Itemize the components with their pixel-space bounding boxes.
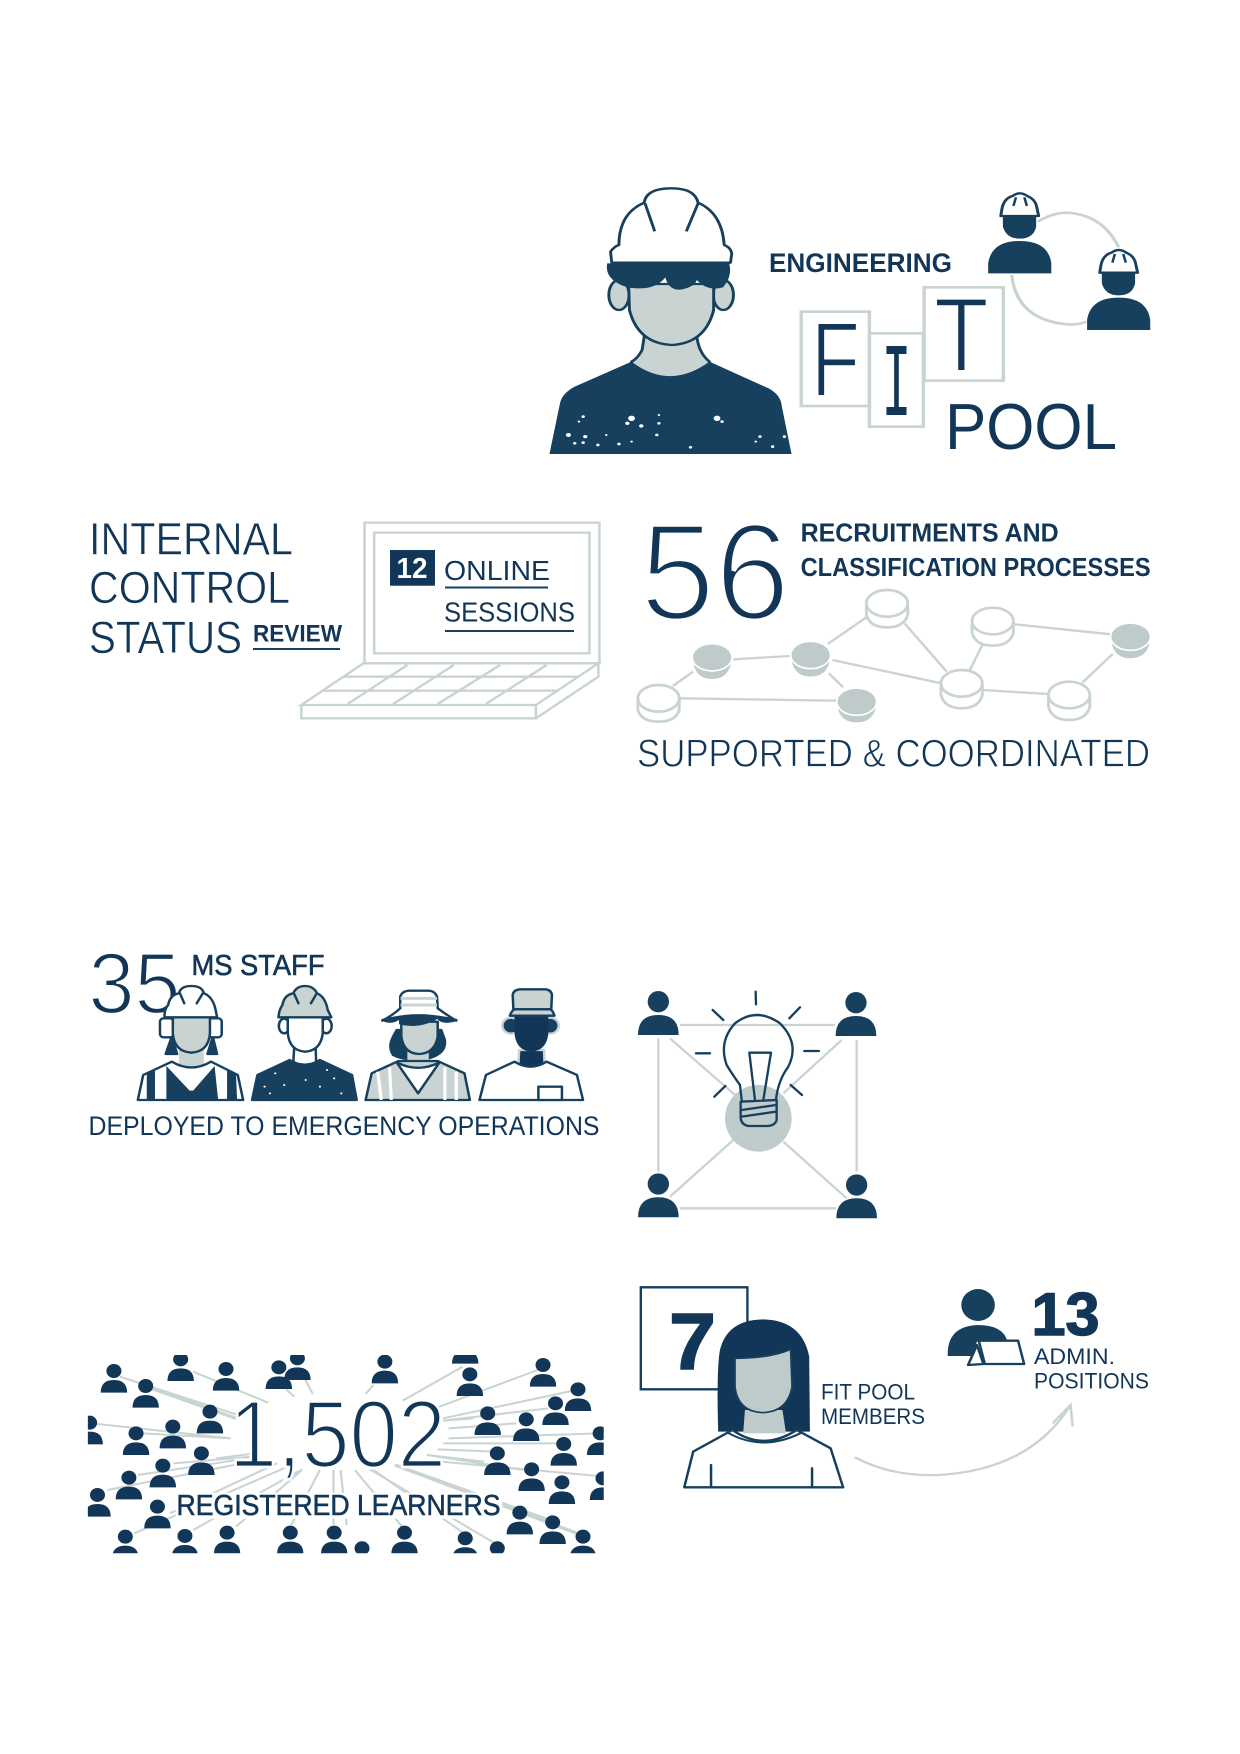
icon: person at laptop — [948, 1289, 1024, 1365]
panel: 7 FIT pool members to 13 admin positions — [641, 1281, 1149, 1487]
illustration: woman with dark hair — [684, 1319, 843, 1487]
panel: Engineering FIT Pool — [549, 188, 1150, 463]
label: FIT pool members: FIT POOL — [821, 1379, 915, 1404]
label: REVIEW: REVIEW — [253, 621, 342, 648]
panel: 56 recruitments and classification processes — [637, 496, 1151, 775]
letter boxes: FIT: F — [811, 300, 860, 420]
label: FIT pool members: MEMBERS — [821, 1404, 925, 1429]
panel: 1,502 registered learners — [88, 1355, 604, 1554]
heading: Internal control status: STATUS — [89, 612, 242, 663]
arrow: curved to admin positions — [855, 1405, 1073, 1475]
icon: two engineers connected in a loop — [988, 193, 1150, 330]
label: online sessions: ONLINE — [444, 555, 550, 586]
badge: 12: 12 — [396, 553, 428, 585]
label: MS staff: MS STAFF — [192, 950, 324, 982]
label: online sessions — [444, 555, 575, 632]
illustration: four emergency staff — [138, 986, 583, 1100]
heading: Internal control status: INTERNAL — [89, 514, 293, 564]
badge: 7: 7 — [669, 1297, 716, 1386]
letter boxes: FIT — [801, 276, 1003, 447]
heading: Internal control status — [89, 514, 293, 663]
figure: staff in grey helmet and navy shirt — [252, 986, 357, 1100]
figure: staff in bucket hat and grey vest — [366, 991, 470, 1100]
letter boxes: FIT: T — [934, 276, 989, 394]
panel: Internal control status review — [89, 514, 599, 718]
label: recruitments and classification processes — [801, 520, 1151, 582]
label: admin positions — [1034, 1344, 1149, 1393]
heading: ENGINEERING: ENGINEERING — [769, 248, 952, 278]
label: supported and coordinated: SUPPORTED & COORDINATED — [637, 732, 1150, 775]
badge: 12 — [390, 550, 435, 586]
label: FIT pool members — [821, 1379, 925, 1429]
badge: 7 — [641, 1287, 747, 1389]
number: 13: 13 — [1032, 1281, 1100, 1348]
heading: POOL: POOL — [945, 390, 1117, 463]
label: deployed to emergency operations: DEPLOYED TO EMERGENCY OPERATIONS — [88, 1111, 600, 1141]
network diagram of nodes — [638, 590, 1151, 722]
label: registered learners: REGISTERED LEARNERS — [176, 1490, 500, 1522]
illustration: laptop — [301, 523, 599, 718]
panel: 35 MS staff deployed — [88, 936, 600, 1141]
number: 1,502: 1,502 — [229, 1381, 446, 1488]
label: online sessions: SESSIONS — [444, 597, 575, 628]
crowd of people with radiating lines — [88, 1355, 604, 1554]
label: admin positions: ADMIN. — [1034, 1344, 1115, 1369]
icon: light bulb connecting four people — [638, 991, 877, 1218]
figure: staff in white helmet and vest — [138, 986, 243, 1100]
number: 35: 35 — [88, 936, 180, 1032]
letter boxes: FIT: I — [882, 328, 912, 447]
label: recruitments and classification processes: CLASSIFICATION PROCESSES — [801, 554, 1151, 582]
number: 56: 56 — [640, 496, 790, 650]
figure: staff in cap with dark face — [479, 989, 583, 1100]
label: recruitments and classification processes: RECRUITMENTS AND — [801, 520, 1059, 548]
label: admin positions: POSITIONS — [1034, 1368, 1149, 1393]
heading: Internal control status: CONTROL — [89, 562, 290, 613]
illustration: engineer with hard hat — [549, 188, 792, 454]
